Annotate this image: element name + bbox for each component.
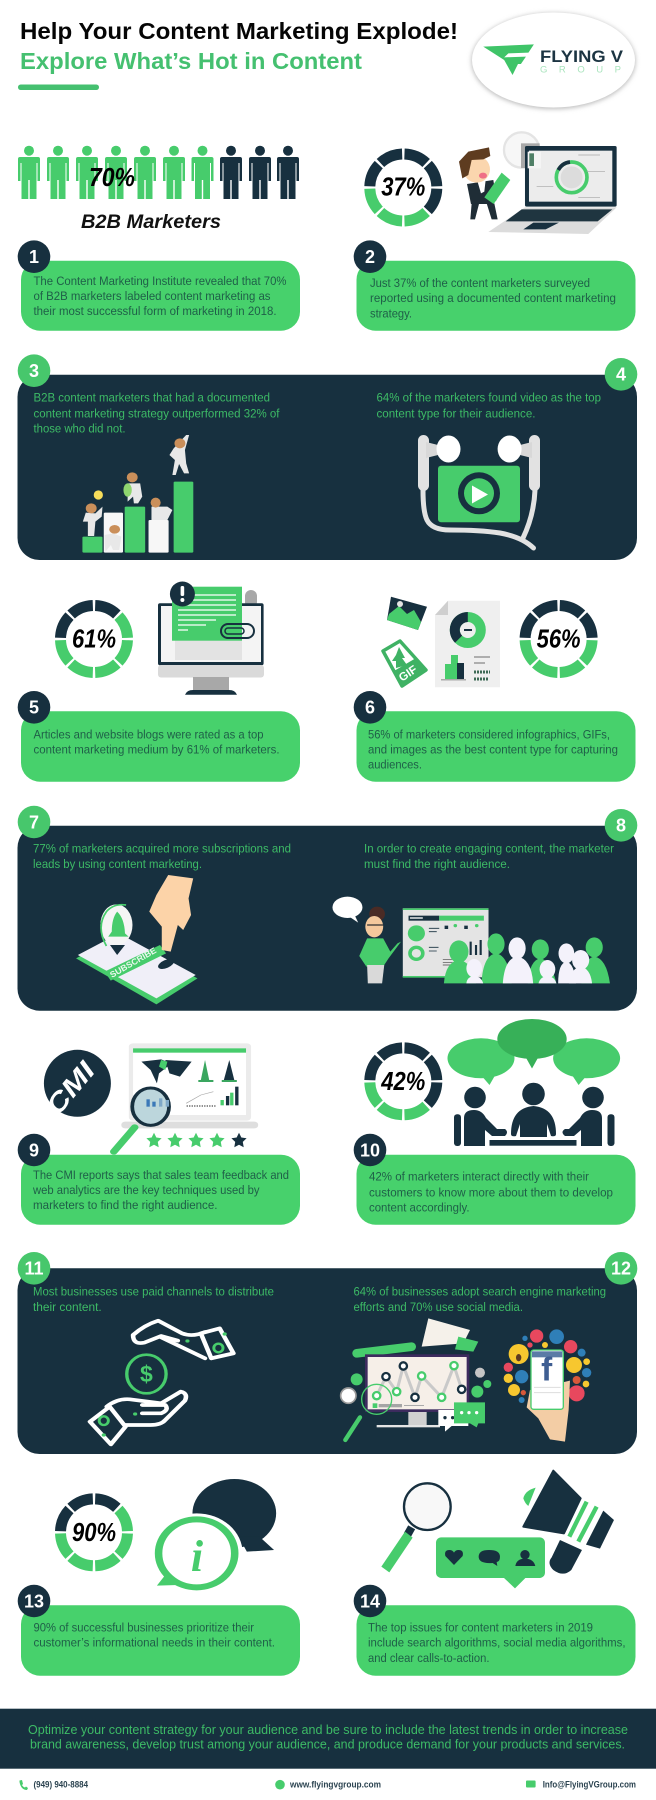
title: Help Your Content Marketing Explode!: [20, 18, 458, 44]
donut: 61%: [48, 593, 140, 685]
card 10: content accordingly.: [369, 1201, 470, 1215]
card 9: marketers to find the right audience.: [33, 1198, 218, 1212]
donut: 90%: [48, 1486, 140, 1579]
panel: items 3 and 4: B2B content marketers that had a documented: [34, 391, 270, 405]
icon: growth steps with business people: [82, 435, 193, 553]
card 1: of B2B marketers labeled content marketing as: [34, 289, 270, 303]
panel: items 3 and 4: those who did not.: [34, 421, 126, 435]
panel: items 7 and 8: In order to create engaging content, the marketer: [364, 841, 614, 855]
card 14: and clear calls-to-action.: [368, 1651, 490, 1665]
logo badge: [472, 12, 636, 109]
card 14: 14: [360, 1591, 380, 1611]
panel: items 7 and 8: must find the right audience.: [364, 857, 510, 871]
panel: items 11 and 12: efforts and 70% use social media.: [354, 1300, 523, 1314]
donut: 37%: [357, 141, 450, 234]
card 14: include search algorithms, social media algorithms,: [368, 1636, 626, 1650]
footer banner: brand awareness, develop trust among your audience, and produce demand for your products and services.: [30, 1736, 625, 1751]
panel: items 3 and 4: [18, 354, 637, 560]
pictogram: 70% of B2B marketers: 70%: [89, 162, 135, 192]
card 9: 9: [29, 1140, 39, 1160]
icon: CMI badge: [39, 1050, 111, 1121]
card 6: 56% of marketers considered infographics, GIFs,: [368, 727, 610, 741]
panel: items 7 and 8: [18, 806, 637, 1011]
card 1: The Content Marketing Institute revealed that 70%: [34, 274, 287, 288]
panel: items 7 and 8: 8: [616, 816, 626, 836]
pictogram: 70% of B2B marketers: B2B Marketers: [81, 212, 221, 233]
icon: info speech bubbles: i: [191, 1532, 204, 1581]
panel: items 11 and 12: their content.: [33, 1300, 102, 1314]
icon: businessman inspecting laptop: [459, 132, 617, 234]
card 9: The CMI reports says that sales team feedback and: [33, 1168, 289, 1182]
icon: presenter with audience: [332, 897, 610, 983]
card 10: customers to know more about them to develop: [369, 1186, 613, 1200]
card 5: [18, 691, 300, 782]
panel: items 11 and 12: 12: [611, 1259, 631, 1279]
card 10: 42% of marketers interact directly with their: [369, 1170, 589, 1184]
panel: items 3 and 4: 64% of the marketers found video as the top: [376, 391, 601, 405]
icon: monitor with article: [158, 582, 264, 695]
icon: infographic document, image and GIF: GIF: [397, 664, 420, 684]
card 9: [18, 1134, 300, 1225]
card 10: [354, 1134, 636, 1225]
donut: 42%: [357, 1035, 450, 1128]
title: [18, 18, 458, 90]
panel: items 7 and 8: leads by using content marketing.: [33, 857, 202, 871]
contact: email: Info@FlyingVGroup.com: [543, 1780, 636, 1790]
donut: 37%: 37%: [381, 172, 425, 202]
icon: marketing dashboard with megaphone: [341, 1318, 591, 1442]
icon: CMI badge: CMI: [39, 1055, 101, 1121]
panel: items 3 and 4: content type for their audience.: [376, 406, 536, 420]
card 5: content marketing medium by 61% of marketers.: [34, 742, 280, 756]
icon: info speech bubbles: [151, 1479, 276, 1593]
card 13: 13: [24, 1591, 44, 1611]
panel: items 11 and 12: Most businesses use paid channels to distribute: [33, 1285, 274, 1299]
contact: phone: (949) 940-8884: [34, 1780, 89, 1790]
card 1: their most successful form of marketing in 2018.: [34, 304, 276, 318]
card 2: 2: [365, 247, 375, 267]
donut: 56%: [512, 593, 605, 685]
donut: 90%: 90%: [72, 1517, 116, 1547]
panel: items 7 and 8: 77% of marketers acquired more subscriptions and: [33, 841, 291, 855]
icon: analytics laptop with magnifier and stars: [114, 1043, 258, 1152]
card 6: and images as the best content type for capturing: [368, 742, 618, 756]
logo badge: GROUP: [540, 64, 621, 76]
panel: items 3 and 4: 3: [29, 361, 39, 381]
card 9: web analytics are the key techniques used by: [32, 1183, 260, 1197]
panel: items 11 and 12: 64% of businesses adopt search engine marketing: [354, 1285, 606, 1299]
card 14: [354, 1585, 636, 1676]
icon: marketing dashboard with megaphone: f: [541, 1352, 553, 1389]
card 5: Articles and website blogs were rated as a top: [34, 727, 264, 741]
card 14: The top issues for content marketers in 2019: [368, 1621, 593, 1635]
panel: items 7 and 8: 7: [29, 812, 39, 832]
icon: hands with dollar coin: [90, 1321, 233, 1444]
icon: magnifier, social box and megaphone: [381, 1471, 614, 1588]
card 13: [18, 1585, 300, 1676]
card 13: 90% of successful businesses prioritize their: [34, 1621, 254, 1635]
card 13: customer’s informational needs in their content.: [34, 1636, 275, 1650]
footer banner: [0, 1709, 656, 1769]
icon: finger pressing subscribe on phone: SUBSCRIBE: [108, 945, 158, 980]
icon: infographic document, image and GIF: [383, 597, 500, 687]
card 6: [354, 691, 636, 782]
card 2: strategy.: [370, 306, 412, 320]
card 6: 6: [365, 698, 375, 718]
card 6: audiences.: [368, 757, 422, 771]
donut: 56%: 56%: [537, 624, 581, 654]
footer banner: Optimize your content strategy for your audience and be sure to include the latest trends in order to increase: [28, 1722, 628, 1737]
logo badge: FLYING V: [540, 47, 624, 66]
icon: hands with dollar coin: $: [140, 1361, 153, 1387]
card 1: 1: [29, 247, 39, 267]
pictogram: 70% of B2B marketers: [18, 146, 299, 233]
panel: items 3 and 4: content marketing strategy outperformed 32% of: [34, 406, 280, 420]
card 2: [354, 240, 636, 331]
contact: website: www.flyingvgroup.com: [289, 1780, 381, 1790]
card 1: [18, 240, 300, 331]
card 2: reported using a documented content marketing: [370, 291, 616, 305]
icon: finger pressing subscribe on phone: [76, 875, 197, 1004]
icon: meeting with speech bubbles: [448, 1019, 620, 1146]
card 5: 5: [29, 698, 39, 718]
donut: 42%: 42%: [380, 1066, 425, 1096]
panel: items 11 and 12: 11: [24, 1259, 44, 1279]
title: Explore What’s Hot in Content: [20, 48, 362, 74]
donut: 61%: 61%: [72, 624, 116, 654]
panel: items 3 and 4: 4: [616, 365, 626, 385]
icon: video with earphones: [418, 435, 540, 548]
contact: phone: [20, 1780, 89, 1790]
card 2: Just 37% of the content marketers surveyed: [370, 276, 590, 290]
card 10: 10: [360, 1140, 380, 1160]
panel: items 11 and 12: [18, 1252, 637, 1454]
